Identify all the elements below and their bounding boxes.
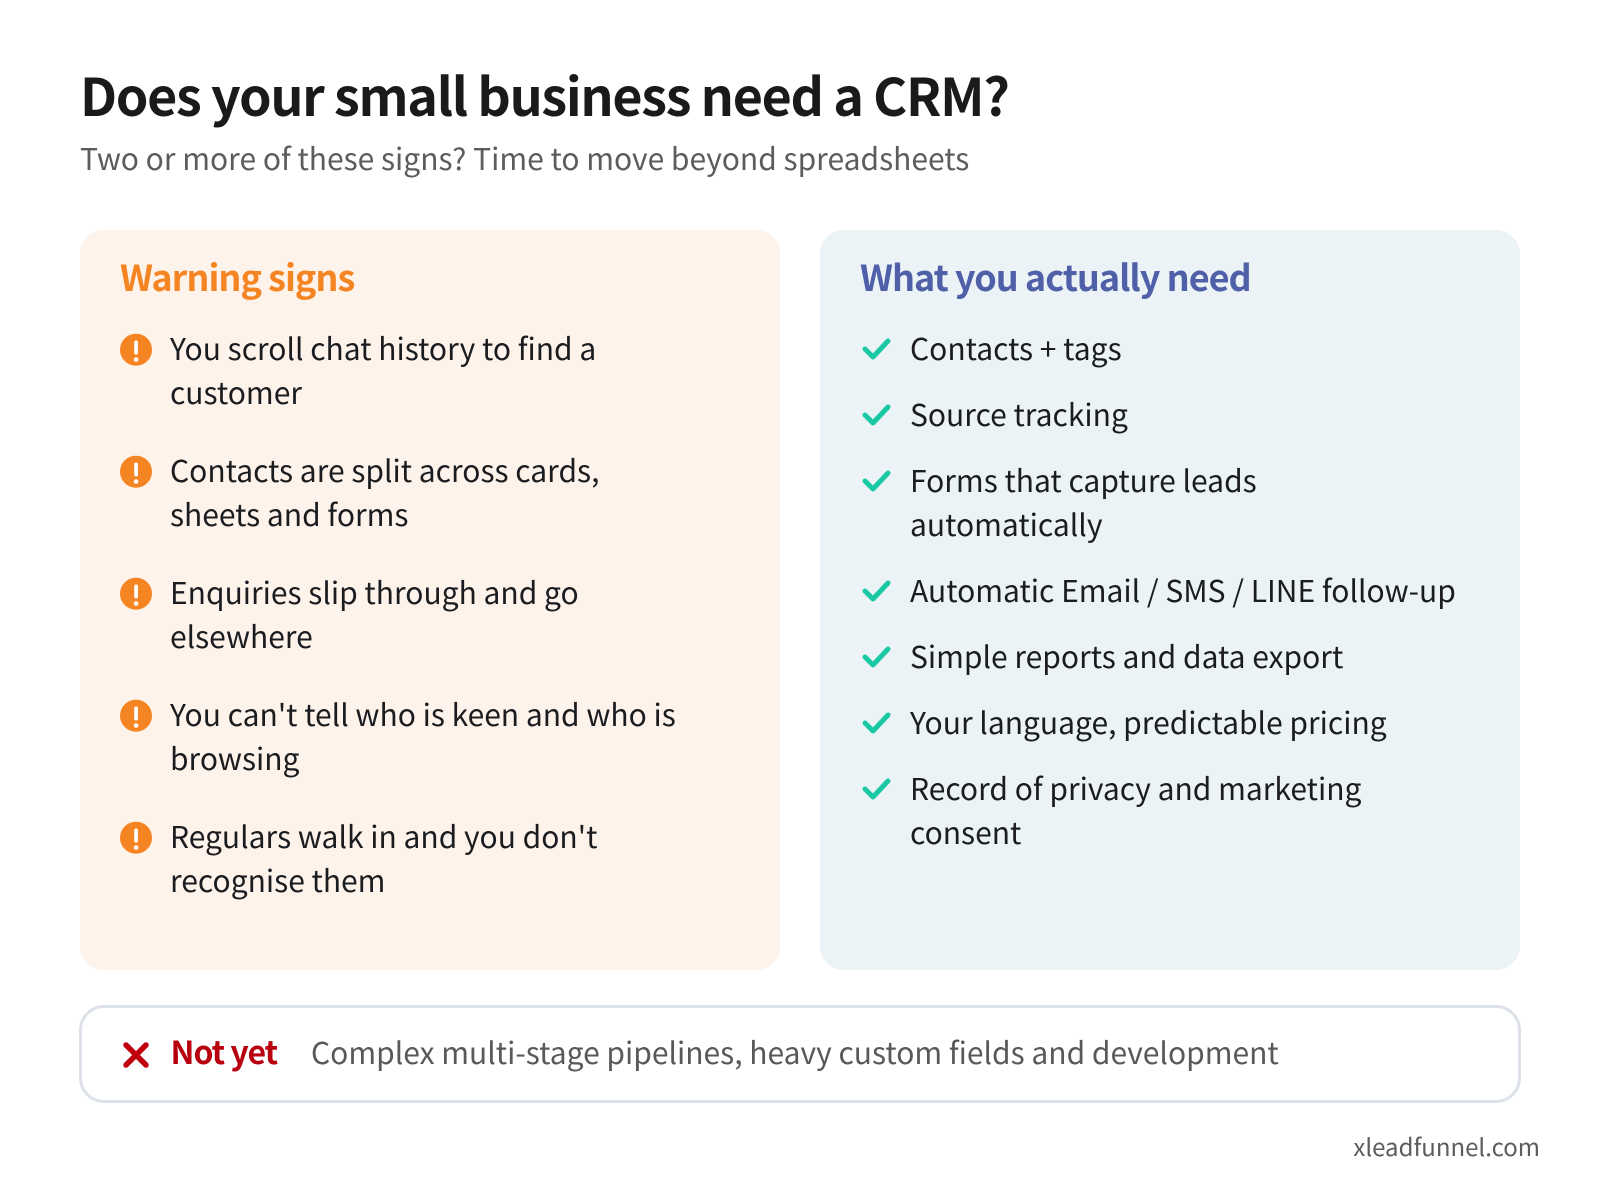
item text: You scroll chat history to find a <box>170 325 596 369</box>
need item 7 <box>862 765 1361 853</box>
callout: not yet <box>78 1004 1521 1103</box>
warning item 1 <box>120 325 596 413</box>
item text: customer <box>170 369 302 413</box>
icon: warning <box>120 700 152 732</box>
need item 6 <box>862 699 1387 743</box>
item text: Contacts are split across cards, <box>170 447 599 491</box>
icon: check <box>862 338 890 360</box>
warning item 5 <box>120 813 597 901</box>
icon: warning <box>120 456 152 488</box>
not yet description: Complex multi-stage pipelines, heavy custom fields and development <box>311 1029 1279 1073</box>
heading: what you actually need: What you actually need <box>860 250 1251 302</box>
title: Does your small business need a CRM? <box>80 56 1009 131</box>
heading: warning signs: Warning signs <box>120 250 354 302</box>
item text: recognise them <box>170 857 385 901</box>
item text <box>170 447 599 535</box>
need item 3 <box>862 457 1257 545</box>
need item 1 <box>862 325 1122 369</box>
item text <box>170 813 597 901</box>
icon: warning <box>120 578 152 610</box>
item text: Contacts + tags <box>910 325 1122 369</box>
item text: You can't tell who is keen and who is <box>170 691 676 735</box>
icon: warning <box>120 822 152 854</box>
item text: browsing <box>170 735 299 779</box>
footer: website: xleadfunnel.com <box>1353 1128 1540 1163</box>
need item 2 <box>862 391 1128 435</box>
item text <box>170 569 579 657</box>
item text: Enquiries slip through and go <box>170 569 579 613</box>
item text: Source tracking <box>910 391 1128 435</box>
item text: Your language, predictable pricing <box>910 699 1387 743</box>
item text: Simple reports and data export <box>910 633 1343 677</box>
item text <box>170 691 676 779</box>
icon: check <box>862 778 890 800</box>
panel: warning signs <box>80 230 780 970</box>
warning item 3 <box>120 569 579 657</box>
warning item 2 <box>120 447 599 535</box>
item text <box>910 457 1257 545</box>
icon: check <box>862 712 890 734</box>
item text <box>170 325 596 413</box>
icon: warning <box>120 334 152 366</box>
subtitle: Two or more of these signs? Time to move beyond spreadsheets <box>80 135 969 179</box>
panel: what you actually need <box>820 230 1520 970</box>
item text: sheets and forms <box>170 491 408 535</box>
icon: check <box>862 470 890 492</box>
need item 4 <box>862 567 1456 611</box>
item text: consent <box>910 809 1021 853</box>
icon: check <box>862 646 890 668</box>
item text: Regulars walk in and you don't <box>170 813 597 857</box>
item text: elsewhere <box>170 613 313 657</box>
item text: Automatic Email / SMS / LINE follow-up <box>910 567 1456 611</box>
label: not yet: Not yet <box>170 1028 277 1074</box>
icon: check <box>862 404 890 426</box>
need item 5 <box>862 633 1343 677</box>
item text: Record of privacy and marketing <box>910 765 1361 809</box>
icon: check <box>862 580 890 602</box>
item text: Forms that capture leads <box>910 457 1257 501</box>
item text <box>910 765 1361 853</box>
item text: automatically <box>910 501 1102 545</box>
icon: cross <box>123 1042 149 1068</box>
warning item 4 <box>120 691 676 779</box>
